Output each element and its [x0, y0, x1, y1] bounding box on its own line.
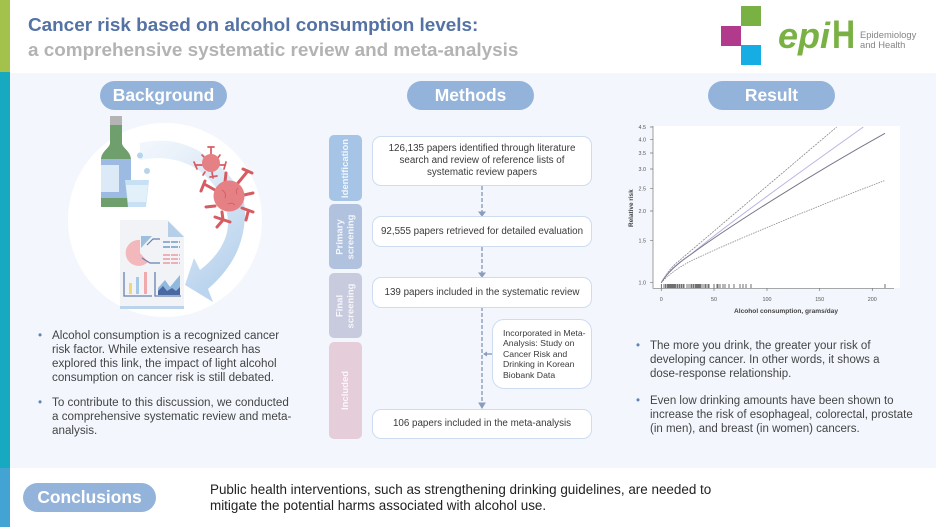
flow stage: Final screening [329, 273, 362, 338]
text block: background [38, 328, 291, 437]
title: a comprehensive systematic review and meta-analysis [28, 40, 518, 61]
flow box: incorporated study: Biobank Data [503, 370, 555, 380]
text block: result: dose-response relationship. [650, 368, 791, 380]
x axis labels: 150 [815, 297, 824, 303]
flow box: identified papers: search and review of reference lists of [399, 155, 564, 166]
icon: glass [125, 180, 149, 207]
heading: Conclusions [23, 483, 156, 512]
chart: relative risk by alcohol consumption: Alcohol consumption, grams/day [734, 308, 838, 315]
text block: result: Even low drinking amounts have been shown to [650, 395, 894, 407]
x axis labels: 50 [711, 297, 717, 303]
heading: Methods [407, 81, 534, 110]
x axis labels: 200 [868, 297, 877, 303]
y axis labels: 1.5 [638, 239, 646, 245]
icon: soju bottle [101, 116, 131, 207]
logo: epiH Epidemiology and Health: epi [778, 15, 830, 56]
icon: small cancer cell [194, 147, 226, 178]
flow stage: Final screening: Final [335, 294, 346, 317]
flow stage: Final screening: screening [346, 283, 357, 328]
heading: Background [100, 81, 227, 110]
title [28, 15, 518, 61]
y axis labels: 1.0 [638, 281, 646, 287]
flow stage: Included [329, 342, 362, 439]
flow stage: Primary screening: Primary [335, 219, 346, 254]
heading: Result: Result [745, 85, 798, 105]
flow box: identified papers: 126,135 papers identified through literature [389, 143, 575, 154]
text block: result: increase the risk of esophageal, colorectal, prostate [650, 409, 913, 421]
y axis labels: 3.5 [638, 151, 646, 157]
text block: background: To contribute to this discussion, we conducted [52, 396, 289, 409]
y axis labels: 2.0 [638, 209, 646, 215]
chart: relative risk by alcohol consumption [628, 125, 900, 315]
text block: background: a comprehensive systematic review and meta- [52, 410, 291, 423]
flow box: meta-analysis: 106 papers included in the meta-analysis [393, 418, 571, 429]
flow stage: Identification: Identification [340, 138, 351, 198]
x axis labels: 100 [762, 297, 772, 303]
logo: epiH Epidemiology and Health: H [832, 13, 855, 57]
flow box: retrieved papers [372, 216, 592, 247]
flow box: retrieved papers: 92,555 papers retrieved for detailed evaluation [381, 226, 583, 236]
risk curves [661, 127, 885, 283]
y axis labels: 3.0 [638, 167, 646, 173]
y axis labels [638, 125, 646, 287]
x axis labels [660, 297, 877, 303]
left accent bar [0, 0, 10, 527]
heading: Result [708, 81, 835, 110]
icon: bubbles [137, 152, 150, 174]
text block: background: Alcohol consumption is a recognized cancer [52, 328, 279, 342]
logo: epiH Epidemiology and Health [721, 6, 916, 65]
flow box: meta-analysis [372, 409, 592, 439]
y axis labels: 2.5 [638, 186, 646, 192]
flow stage: Primary screening [329, 204, 362, 269]
x axis labels: 0 [660, 297, 663, 303]
text block: conclusions [210, 482, 711, 513]
flow box: incorporated study: Incorporated in Meta- [503, 328, 586, 338]
icon: curved arrow [140, 141, 245, 302]
text block: conclusions: mitigate the potential harms associated with alcohol use. [210, 498, 546, 513]
logo: epiH Epidemiology and Health: Epidemiology [860, 29, 916, 40]
flow box: incorporated study: Cancer Risk and [503, 349, 567, 359]
text block: result: (in men), and breast (in women) cancers. [650, 423, 860, 435]
text block: background: consumption on cancer risk is still debated. [52, 371, 274, 384]
flow box: identified papers: systematic review papers [427, 167, 537, 178]
flow box: systematic review [372, 277, 592, 308]
text block: conclusions: Public health interventions, such as strengthening drinking guidelines, are needed to [210, 482, 711, 497]
text block: background: risk factor. While extensive research has [52, 343, 260, 356]
panel: main background [10, 73, 936, 468]
title: Cancer risk based on alcohol consumption levels: [28, 15, 478, 36]
flow box: incorporated study [492, 319, 592, 389]
text block: background: analysis. [52, 424, 97, 437]
flow connectors [478, 186, 492, 409]
flow box: incorporated study: Analysis: Study on [503, 338, 574, 348]
logo: epiH Epidemiology and Health: and Health [860, 39, 905, 50]
rug plot [661, 284, 885, 288]
heading: Background: Background [113, 85, 214, 105]
heading: Conclusions: Conclusions [37, 487, 142, 507]
axis titles: Relative risk [628, 189, 635, 227]
text block: result [636, 340, 913, 435]
flow box: incorporated study: Drinking in Korean [503, 359, 574, 369]
heading: Methods: Methods [435, 85, 506, 105]
text block: result: developing cancer. In other words, it shows a [650, 354, 880, 366]
flow stage: Included: Included [340, 371, 351, 410]
y axis labels: 4.0 [638, 137, 646, 143]
y axis labels: 4.5 [638, 125, 646, 131]
flow stage: Primary screening: screening [346, 214, 357, 259]
flow stage: Identification [329, 135, 362, 201]
icon: large cancer cell [201, 169, 253, 227]
icon: research report [120, 220, 184, 309]
text block: background: explored this link, the impact of light alcohol [52, 357, 277, 370]
text block: result: The more you drink, the greater your risk of [650, 340, 871, 352]
flow box: identified papers [372, 136, 592, 186]
illustration: alcohol, cancer cell and research report cycle [68, 116, 262, 317]
flow box: systematic review: 139 papers included in the systematic review [385, 286, 579, 298]
